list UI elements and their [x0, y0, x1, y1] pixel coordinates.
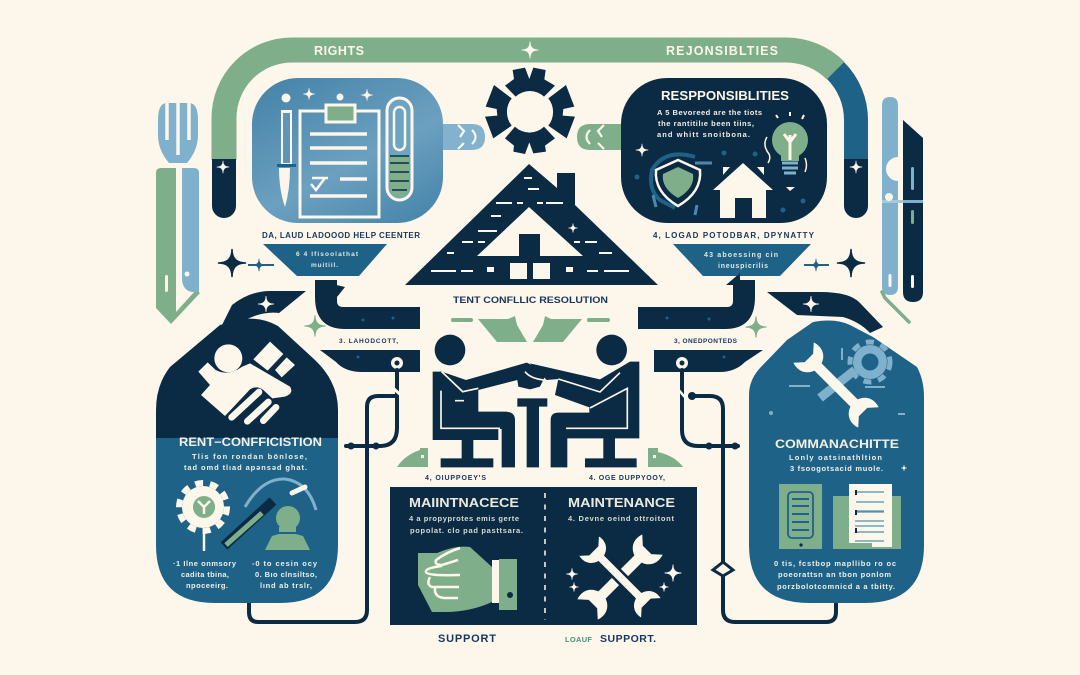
text block: responsibilities body: A 5 Bevoreed are the tiots [657, 108, 762, 117]
top band [767, 292, 883, 333]
icon: sparkles [218, 250, 864, 337]
neck band [222, 291, 306, 325]
icon: green fist [418, 547, 517, 612]
callout: right funnel: 43 aboessing cin [704, 252, 778, 259]
icon: document [833, 484, 901, 549]
label: support: SUPPORT [438, 633, 496, 645]
icon: gear with y [179, 483, 227, 551]
text block: left steps: cadita tbina, [181, 570, 229, 579]
connector left [443, 124, 485, 150]
callout: right funnel: ineuspicrilis [718, 263, 768, 270]
text block: comm footer: porzbolotcomnicd a a tbitty. [777, 582, 895, 591]
text block: comm footer: 0 tis, fcstbop mapllibo ro oc [774, 559, 896, 568]
callout: right funnel [673, 244, 811, 276]
icon: utensils right [882, 97, 923, 322]
panel: landlord help center clipboard [252, 78, 443, 223]
callout: left funnel: muitiil. [311, 262, 338, 269]
text block: comm footer [774, 559, 896, 591]
arch band: rights and responsibilities [212, 42, 868, 218]
connector right [577, 124, 621, 150]
heading: left maintenance: MAIINTNACECE [409, 496, 519, 510]
heading: responsibilities: RESPPONSIBLITIES [661, 89, 789, 103]
label: left landlord: 3. LAHODCOTT, [339, 338, 398, 345]
label: load support: LOAUF [565, 635, 592, 644]
heading: right maintenance: MAINTENANCE [568, 496, 675, 510]
text block: rent intro [184, 452, 307, 472]
callout: left funnel: 6 4 Ifisoolathat [296, 251, 359, 258]
label: left support: 4, OIUPPOEY'S [425, 475, 486, 482]
icon: green roof flaps [451, 316, 610, 342]
callout: left funnel [263, 244, 387, 276]
text block: left steps: -0 to cesin ocy [252, 559, 318, 568]
text block: comm intro: Lonly oatsinathltion [789, 453, 882, 462]
icon: green device [779, 484, 822, 549]
icon: two figures at table [433, 335, 639, 467]
icon: central gear [485, 68, 575, 154]
panel: communication shield [749, 292, 924, 603]
text block: comm intro: 3 fsoogotsacid muole. [790, 464, 883, 473]
text block: responsibilities body: the rantitilıe been tiins, [658, 119, 754, 128]
text block: rent intro: Tlis fon rondan bönlose, [192, 452, 307, 461]
icon: crossed wrenches [566, 534, 681, 620]
heading: rent confiction: RENT−CONFFICISTION [179, 437, 322, 449]
label: right potential: 4, LOGAD POTODBAR, DPYNATTY [653, 231, 815, 240]
icon: gavel and person [224, 479, 316, 550]
heading: commanachitte: COMMANACHITTE [775, 439, 899, 451]
text block: left maintenance [409, 514, 523, 535]
text block: left steps: npoceeirg. [186, 581, 228, 590]
text block: left steps [173, 559, 318, 590]
text block: left maintenance: popolat. clo pad pasttsara. [410, 526, 523, 535]
panel: responsibilities [621, 78, 827, 223]
right figure [530, 362, 639, 467]
text block: responsibilities body: and whitt snoitbona. [657, 130, 750, 139]
icon: green feet [397, 448, 683, 467]
icon: roof [405, 164, 658, 285]
arch band: rights and responsibilities: REJONSIBLTIES [666, 44, 778, 58]
panel: maintenance [390, 487, 697, 625]
left figure [433, 363, 547, 467]
icon: clipboard [300, 105, 379, 217]
icon: paperclip tube [387, 98, 412, 200]
label: load support [565, 633, 656, 645]
text block: left steps: 0. Bıo clnsiltso, [255, 570, 317, 579]
icon: pen [277, 94, 296, 207]
heading: tenant conflict resolution: TENT CONFLLIC RESOLUTION [453, 295, 608, 306]
label: right responders: 3, ONEDPONTEDS [674, 338, 738, 345]
panel: rent confiction shield [156, 291, 338, 603]
text block: right maintenance: 4. Devne oeind ottroitont [568, 514, 674, 523]
icon: wrench and gear [769, 342, 905, 428]
text block: comm footer: poeorattsn an tbon ponlom [778, 570, 891, 579]
icon: fork and knife left [156, 103, 200, 324]
label: left help center: DA, LAUD LADOOOD HELP CEENTER [262, 231, 420, 240]
text block: left maintenance: 4 a propyprotes emis gerte [409, 514, 519, 523]
table [517, 398, 547, 467]
icon: house [713, 163, 773, 218]
icon: light bulb [765, 112, 808, 191]
text block: left steps: lınd ab trslr, [260, 581, 312, 590]
text block: rent intro: tad omd tlıad apənsəd ghat. [184, 463, 307, 472]
text block: comm intro [789, 453, 883, 473]
icon: shield [651, 154, 712, 215]
text block: responsibilities body [657, 108, 762, 139]
arch band: rights and responsibilities: RIGHTS [314, 44, 364, 58]
clasped hands [525, 372, 543, 380]
pipes: right [638, 273, 836, 622]
label: right support: 4. OGE DUPPYOOY, [589, 475, 665, 482]
text block: left steps: ·1 Ilne onmsory [173, 559, 237, 568]
label: load support: SUPPORT. [600, 633, 656, 645]
pipes: left [249, 280, 420, 622]
icon: handshake [198, 342, 295, 421]
